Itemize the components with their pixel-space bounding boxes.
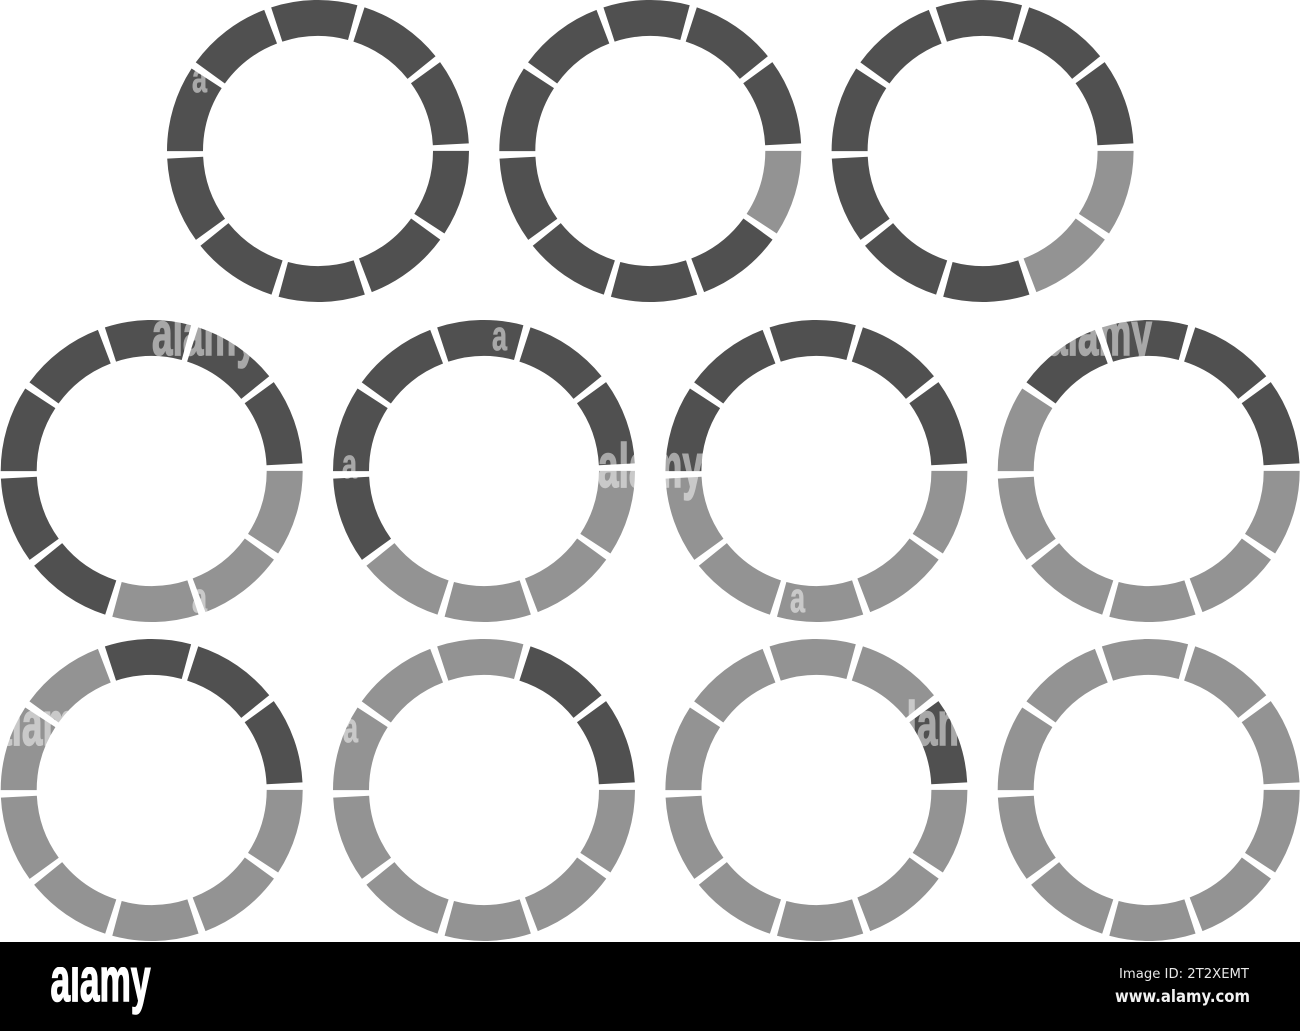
watermark overlay: a — [342, 440, 357, 487]
dark segments — [0, 285, 337, 657]
watermark overlay: a — [192, 574, 207, 621]
watermark overlay: alamy — [886, 690, 991, 759]
dark segments — [132, 0, 504, 337]
watermark overlay: a — [790, 574, 805, 621]
dark segments — [797, 0, 1168, 337]
watermark overlay: a — [192, 54, 207, 101]
ring 1: all ten segments dark — [132, 0, 504, 337]
ring 8: seven gray segments — [0, 604, 337, 976]
ring 4: three gray segments — [0, 285, 337, 657]
gray segments — [298, 285, 670, 657]
dark segments — [0, 604, 337, 976]
footer bar — [0, 942, 1300, 1031]
dark segments — [298, 604, 670, 976]
gray segments — [963, 604, 1300, 976]
ring 5: four gray segments — [298, 285, 670, 657]
watermark overlay: alamy — [152, 300, 257, 369]
ring 3: two gray segments — [797, 0, 1168, 337]
gray segments — [298, 604, 670, 976]
image id: Image ID: 2T2XEMT — [1119, 966, 1250, 982]
ring 7: six gray segments — [963, 285, 1300, 657]
gray segments — [963, 285, 1300, 657]
watermark overlay: alamy — [598, 432, 703, 501]
gray segments — [0, 604, 337, 976]
gray segments — [0, 285, 337, 657]
website: www.alamy.com — [1115, 987, 1250, 1006]
watermark overlay: a — [492, 312, 507, 359]
gray segments — [797, 0, 1168, 337]
dark segments — [631, 285, 1002, 657]
dark segments — [465, 0, 836, 337]
ring 10: nine gray segments — [631, 604, 1002, 976]
watermark overlay: alamy — [1047, 300, 1152, 369]
ring 9: eight gray segments — [298, 604, 670, 976]
watermark overlay: a — [343, 704, 358, 751]
gray segments — [631, 604, 1002, 976]
dark segments — [298, 285, 670, 657]
watermark overlay — [0, 54, 1152, 759]
ring 6: five gray segments — [631, 285, 1002, 657]
ring 2: one gray segment — [465, 0, 836, 337]
ring 11: all ten segments gray — [963, 604, 1300, 976]
footer logo: alamy — [50, 946, 151, 1015]
gray segments — [631, 285, 1002, 657]
dark segments — [631, 604, 1002, 976]
dark segments — [963, 285, 1300, 657]
gray segments — [517, 18, 783, 284]
